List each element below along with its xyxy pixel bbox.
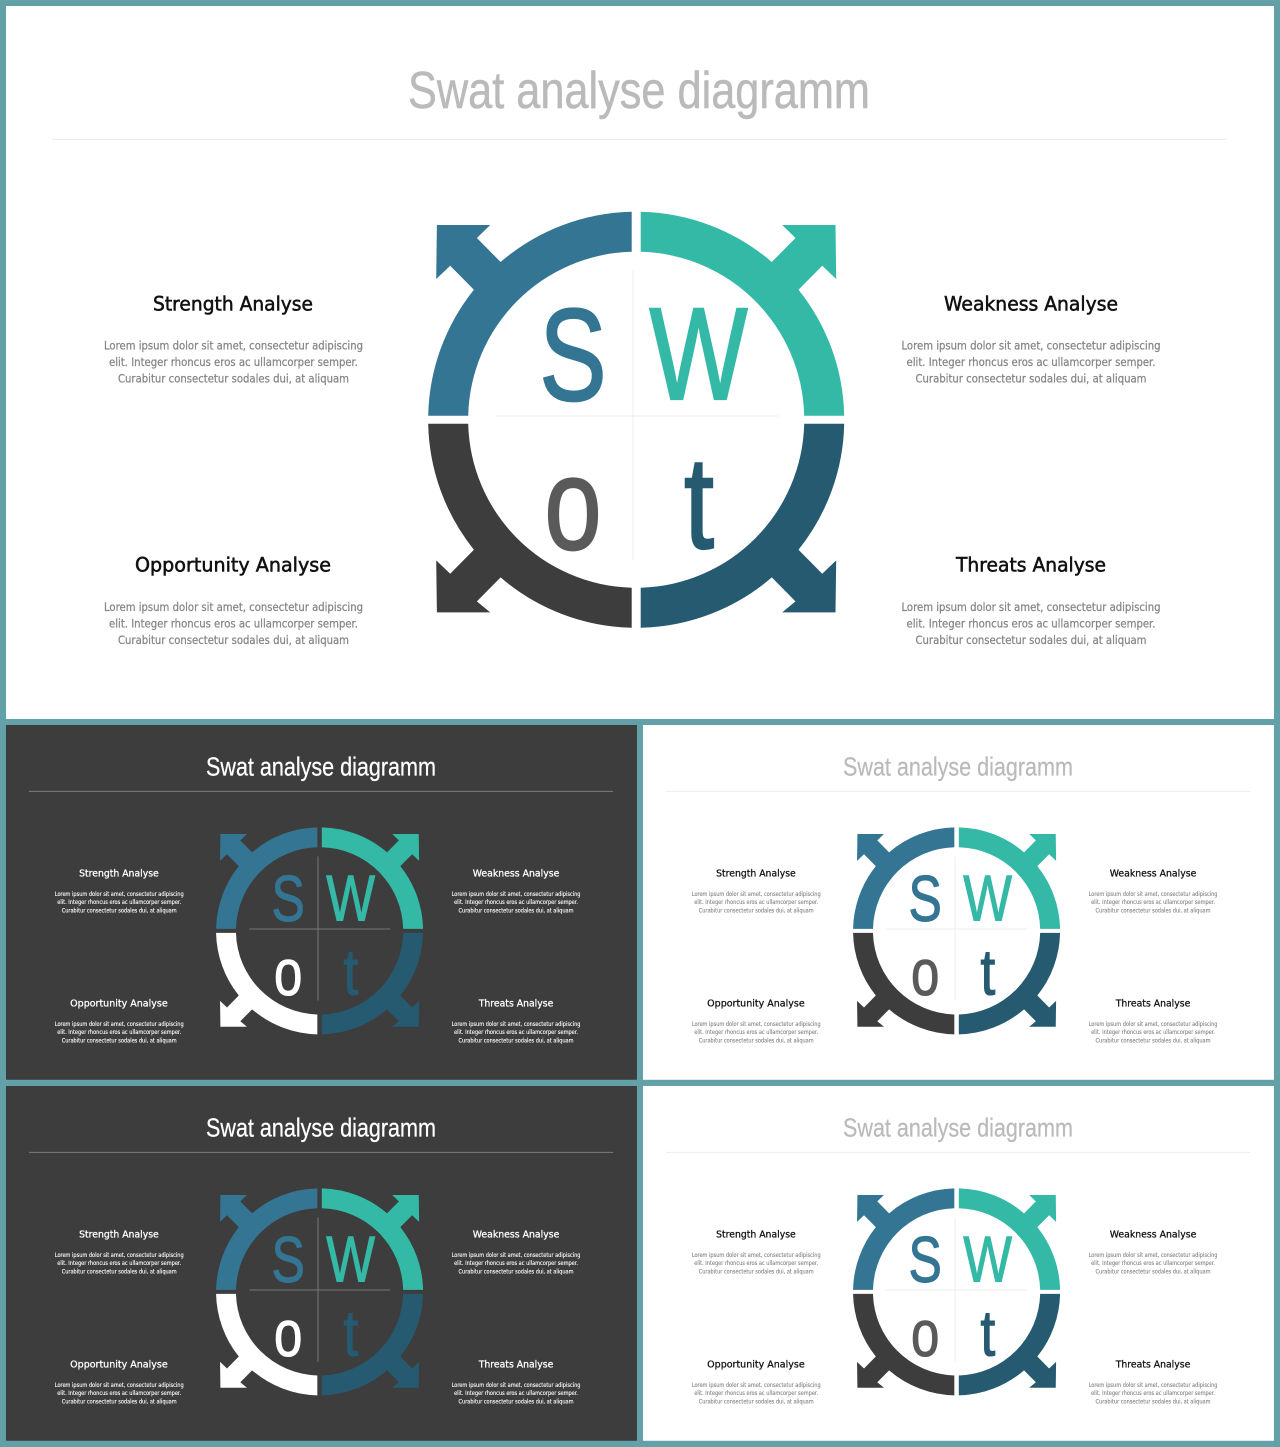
text block: weakness: elit. Integer rhoncus eros ac ullamcorper semper. bbox=[1091, 900, 1215, 906]
text block: strength: Lorem ipsum dolor sit amet, consectetur adipiscing bbox=[55, 1253, 184, 1259]
text block: opportunity bbox=[55, 998, 184, 1044]
text block: opportunity: elit. Integer rhoncus eros ac ullamcorper semper. bbox=[694, 1391, 818, 1397]
text block: strength: elit. Integer rhoncus eros ac ullamcorper semper. bbox=[694, 1261, 818, 1267]
text block: threats: Curabitur consectetur sodales dui, at aliquam bbox=[1096, 1399, 1211, 1405]
text block: threats: elit. Integer rhoncus eros ac ullamcorper semper. bbox=[1091, 1030, 1215, 1036]
text block: strength: elit. Integer rhoncus eros ac ullamcorper semper. bbox=[694, 900, 818, 906]
ring segment: opportunity arrow bbox=[216, 1294, 317, 1395]
text block: weakness: elit. Integer rhoncus eros ac ullamcorper semper. bbox=[1091, 1261, 1215, 1267]
text block: threats: Threats Analyse bbox=[1115, 998, 1190, 1009]
text block: opportunity: Opportunity Analyse bbox=[707, 1359, 805, 1370]
text block: strength: Curabitur consectetur sodales dui, at aliquam bbox=[699, 908, 814, 914]
title: Swat analyse diagramm bbox=[206, 1115, 436, 1143]
text block: opportunity: Curabitur consectetur sodales dui, at aliquam bbox=[118, 633, 349, 647]
diagram: SWOT ring bbox=[216, 1188, 423, 1395]
text block: threats: elit. Integer rhoncus eros ac ullamcorper semper. bbox=[906, 616, 1156, 630]
text block: opportunity bbox=[55, 1359, 184, 1405]
text block: opportunity: Lorem ipsum dolor sit amet, consectetur adipiscing bbox=[104, 600, 363, 614]
text block: strength: Curabitur consectetur sodales dui, at aliquam bbox=[62, 1269, 177, 1275]
ring segment: weakness arrow bbox=[322, 1188, 423, 1290]
text block: opportunity: Curabitur consectetur sodales dui, at aliquam bbox=[62, 1038, 177, 1044]
letter t: t bbox=[980, 1297, 995, 1370]
text block: threats: Threats Analyse bbox=[955, 554, 1106, 576]
ring segment: opportunity arrow bbox=[853, 1294, 954, 1395]
text block: opportunity bbox=[692, 998, 821, 1044]
text block: opportunity: elit. Integer rhoncus eros ac ullamcorper semper. bbox=[694, 1030, 818, 1036]
text block: strength: Lorem ipsum dolor sit amet, consectetur adipiscing bbox=[692, 892, 821, 898]
text block: weakness: elit. Integer rhoncus eros ac ullamcorper semper. bbox=[906, 355, 1156, 369]
text block: threats bbox=[1089, 1359, 1218, 1405]
text block: strength: Strength Analyse bbox=[716, 869, 796, 880]
text block: strength bbox=[55, 1230, 184, 1275]
title: Swat analyse diagramm bbox=[843, 754, 1073, 782]
text block: threats: elit. Integer rhoncus eros ac ullamcorper semper. bbox=[454, 1391, 578, 1397]
text block: weakness bbox=[902, 292, 1160, 386]
letter o: o bbox=[911, 1297, 939, 1370]
text block: threats bbox=[452, 998, 581, 1044]
diagram: SWOT ring bbox=[853, 827, 1060, 1034]
text block: strength: Curabitur consectetur sodales dui, at aliquam bbox=[699, 1269, 814, 1275]
text block: opportunity: Lorem ipsum dolor sit amet, consectetur adipiscing bbox=[55, 1022, 184, 1028]
letter o: o bbox=[274, 1297, 302, 1370]
ring segment: threats arrow bbox=[641, 424, 844, 628]
text block: threats bbox=[1089, 998, 1218, 1044]
letter t: t bbox=[343, 936, 358, 1009]
letter o: o bbox=[911, 936, 939, 1009]
diagram: SWOT ring bbox=[428, 212, 844, 628]
text block: opportunity: elit. Integer rhoncus eros ac ullamcorper semper. bbox=[109, 616, 358, 630]
text block: strength bbox=[55, 869, 184, 914]
text block: weakness: Lorem ipsum dolor sit amet, consectetur adipiscing bbox=[1089, 892, 1218, 898]
ring segment: strength arrow bbox=[853, 1188, 954, 1290]
ring segment: strength arrow bbox=[853, 827, 954, 929]
text block: weakness: Weakness Analyse bbox=[1110, 869, 1196, 880]
text block: opportunity: Opportunity Analyse bbox=[135, 554, 331, 576]
letter W: W bbox=[650, 280, 748, 427]
text block: threats bbox=[902, 554, 1160, 647]
text block: weakness: Curabitur consectetur sodales dui, at aliquam bbox=[916, 372, 1146, 386]
text block: threats: Curabitur consectetur sodales dui, at aliquam bbox=[459, 1399, 574, 1405]
panel: main light slide bbox=[6, 6, 1274, 719]
letter S: S bbox=[540, 281, 606, 428]
text block: threats: Curabitur consectetur sodales dui, at aliquam bbox=[1096, 1038, 1211, 1044]
ring segment: threats arrow bbox=[322, 1294, 423, 1395]
ring segment: strength arrow bbox=[216, 1188, 317, 1290]
text block: weakness bbox=[1089, 869, 1218, 914]
text block: threats: elit. Integer rhoncus eros ac ullamcorper semper. bbox=[454, 1030, 578, 1036]
title: Swat analyse diagramm bbox=[843, 1115, 1073, 1143]
text block: strength: Lorem ipsum dolor sit amet, consectetur adipiscing bbox=[55, 892, 184, 898]
text block: strength: elit. Integer rhoncus eros ac ullamcorper semper. bbox=[57, 900, 181, 906]
text block: weakness bbox=[452, 869, 581, 914]
text block: strength: elit. Integer rhoncus eros ac ullamcorper semper. bbox=[57, 1261, 181, 1267]
text block: weakness bbox=[1089, 1230, 1218, 1275]
text block: opportunity: Curabitur consectetur sodales dui, at aliquam bbox=[62, 1399, 177, 1405]
text block: threats: Threats Analyse bbox=[478, 1359, 553, 1370]
text block: strength: Strength Analyse bbox=[79, 1230, 159, 1241]
ring segment: opportunity arrow bbox=[853, 933, 954, 1034]
letter S: S bbox=[271, 1223, 305, 1296]
letter t: t bbox=[684, 429, 714, 576]
text block: opportunity: Opportunity Analyse bbox=[707, 998, 805, 1009]
title: Swat analyse diagramm bbox=[408, 62, 870, 120]
ring segment: opportunity arrow bbox=[216, 933, 317, 1034]
text block: weakness: Curabitur consectetur sodales dui, at aliquam bbox=[1096, 908, 1211, 914]
text block: weakness: Lorem ipsum dolor sit amet, consectetur adipiscing bbox=[452, 892, 581, 898]
text block: weakness bbox=[452, 1230, 581, 1275]
letter W: W bbox=[963, 1223, 1012, 1296]
text block: opportunity: Lorem ipsum dolor sit amet, consectetur adipiscing bbox=[55, 1383, 184, 1389]
text block: weakness: elit. Integer rhoncus eros ac ullamcorper semper. bbox=[454, 900, 578, 906]
text block: opportunity: elit. Integer rhoncus eros ac ullamcorper semper. bbox=[57, 1391, 181, 1397]
text block: opportunity bbox=[692, 1359, 821, 1405]
text block: weakness: Weakness Analyse bbox=[473, 1230, 559, 1241]
text block: threats: Threats Analyse bbox=[1115, 1359, 1190, 1370]
text block: weakness: Weakness Analyse bbox=[473, 869, 559, 880]
text block: strength: Strength Analyse bbox=[716, 1230, 796, 1241]
text block: strength: Curabitur consectetur sodales dui, at aliquam bbox=[118, 372, 349, 386]
letter S: S bbox=[908, 862, 942, 935]
ring segment: threats arrow bbox=[959, 1294, 1060, 1395]
text block: strength bbox=[692, 1230, 821, 1275]
letter W: W bbox=[326, 862, 375, 935]
text block: strength bbox=[692, 869, 821, 914]
text block: strength: Curabitur consectetur sodales dui, at aliquam bbox=[62, 908, 177, 914]
ring segment: weakness arrow bbox=[959, 1188, 1060, 1290]
ring segment: weakness arrow bbox=[641, 212, 844, 416]
text block: strength bbox=[104, 292, 363, 386]
text block: strength: Lorem ipsum dolor sit amet, consectetur adipiscing bbox=[104, 338, 363, 352]
panel: dark thumbnail top bbox=[6, 725, 637, 1080]
text block: strength: Strength Analyse bbox=[79, 869, 159, 880]
diagram: SWOT ring bbox=[853, 1188, 1060, 1395]
text block: weakness: Lorem ipsum dolor sit amet, consectetur adipiscing bbox=[452, 1253, 581, 1259]
text block: threats: Lorem ipsum dolor sit amet, consectetur adipiscing bbox=[902, 600, 1160, 614]
text block: threats: Threats Analyse bbox=[478, 998, 553, 1009]
text block: weakness: Weakness Analyse bbox=[1110, 1230, 1196, 1241]
text block: opportunity: Lorem ipsum dolor sit amet, consectetur adipiscing bbox=[692, 1022, 821, 1028]
panel: dark thumbnail bottom bbox=[6, 1086, 637, 1441]
text block: opportunity: Opportunity Analyse bbox=[70, 998, 168, 1009]
letter S: S bbox=[271, 862, 305, 935]
letter W: W bbox=[963, 862, 1012, 935]
text block: weakness: Weakness Analyse bbox=[944, 292, 1118, 316]
text block: weakness: Curabitur consectetur sodales dui, at aliquam bbox=[459, 908, 574, 914]
text block: opportunity: Opportunity Analyse bbox=[70, 1359, 168, 1370]
ring segment: threats arrow bbox=[322, 933, 423, 1034]
panel: light thumbnail bottom bbox=[643, 1086, 1274, 1441]
text block: opportunity: elit. Integer rhoncus eros ac ullamcorper semper. bbox=[57, 1030, 181, 1036]
ring segment: threats arrow bbox=[959, 933, 1060, 1034]
text block: weakness: elit. Integer rhoncus eros ac ullamcorper semper. bbox=[454, 1261, 578, 1267]
letter S: S bbox=[908, 1223, 942, 1296]
letter W: W bbox=[326, 1223, 375, 1296]
text block: strength: Strength Analyse bbox=[153, 292, 313, 316]
ring segment: weakness arrow bbox=[322, 827, 423, 929]
text block: threats: Lorem ipsum dolor sit amet, consectetur adipiscing bbox=[452, 1383, 581, 1389]
text block: opportunity: Curabitur consectetur sodales dui, at aliquam bbox=[699, 1399, 814, 1405]
text block: threats: Lorem ipsum dolor sit amet, consectetur adipiscing bbox=[452, 1022, 581, 1028]
text block: opportunity: Lorem ipsum dolor sit amet, consectetur adipiscing bbox=[692, 1383, 821, 1389]
text block: threats: elit. Integer rhoncus eros ac ullamcorper semper. bbox=[1091, 1391, 1215, 1397]
ring segment: strength arrow bbox=[216, 827, 317, 929]
panel: light thumbnail top bbox=[643, 725, 1274, 1080]
text block: opportunity bbox=[104, 554, 363, 647]
text block: strength: Lorem ipsum dolor sit amet, consectetur adipiscing bbox=[692, 1253, 821, 1259]
text block: threats: Lorem ipsum dolor sit amet, consectetur adipiscing bbox=[1089, 1022, 1218, 1028]
text block: threats: Curabitur consectetur sodales dui, at aliquam bbox=[916, 633, 1146, 647]
ring segment: weakness arrow bbox=[959, 827, 1060, 929]
ring segment: opportunity arrow bbox=[428, 424, 632, 628]
text block: threats: Lorem ipsum dolor sit amet, consectetur adipiscing bbox=[1089, 1383, 1218, 1389]
diagram: SWOT ring bbox=[216, 827, 423, 1034]
text block: threats bbox=[452, 1359, 581, 1405]
text block: weakness: Curabitur consectetur sodales dui, at aliquam bbox=[1096, 1269, 1211, 1275]
letter t: t bbox=[980, 936, 995, 1009]
text block: threats: Curabitur consectetur sodales dui, at aliquam bbox=[459, 1038, 574, 1044]
text block: opportunity: Curabitur consectetur sodales dui, at aliquam bbox=[699, 1038, 814, 1044]
title: Swat analyse diagramm bbox=[206, 754, 436, 782]
ring segment: strength arrow bbox=[428, 212, 632, 416]
text block: strength: elit. Integer rhoncus eros ac ullamcorper semper. bbox=[109, 355, 358, 369]
letter o: o bbox=[544, 430, 602, 577]
text block: weakness: Curabitur consectetur sodales dui, at aliquam bbox=[459, 1269, 574, 1275]
letter t: t bbox=[343, 1297, 358, 1370]
text block: weakness: Lorem ipsum dolor sit amet, consectetur adipiscing bbox=[902, 338, 1160, 352]
text block: weakness: Lorem ipsum dolor sit amet, consectetur adipiscing bbox=[1089, 1253, 1218, 1259]
letter o: o bbox=[274, 936, 302, 1009]
